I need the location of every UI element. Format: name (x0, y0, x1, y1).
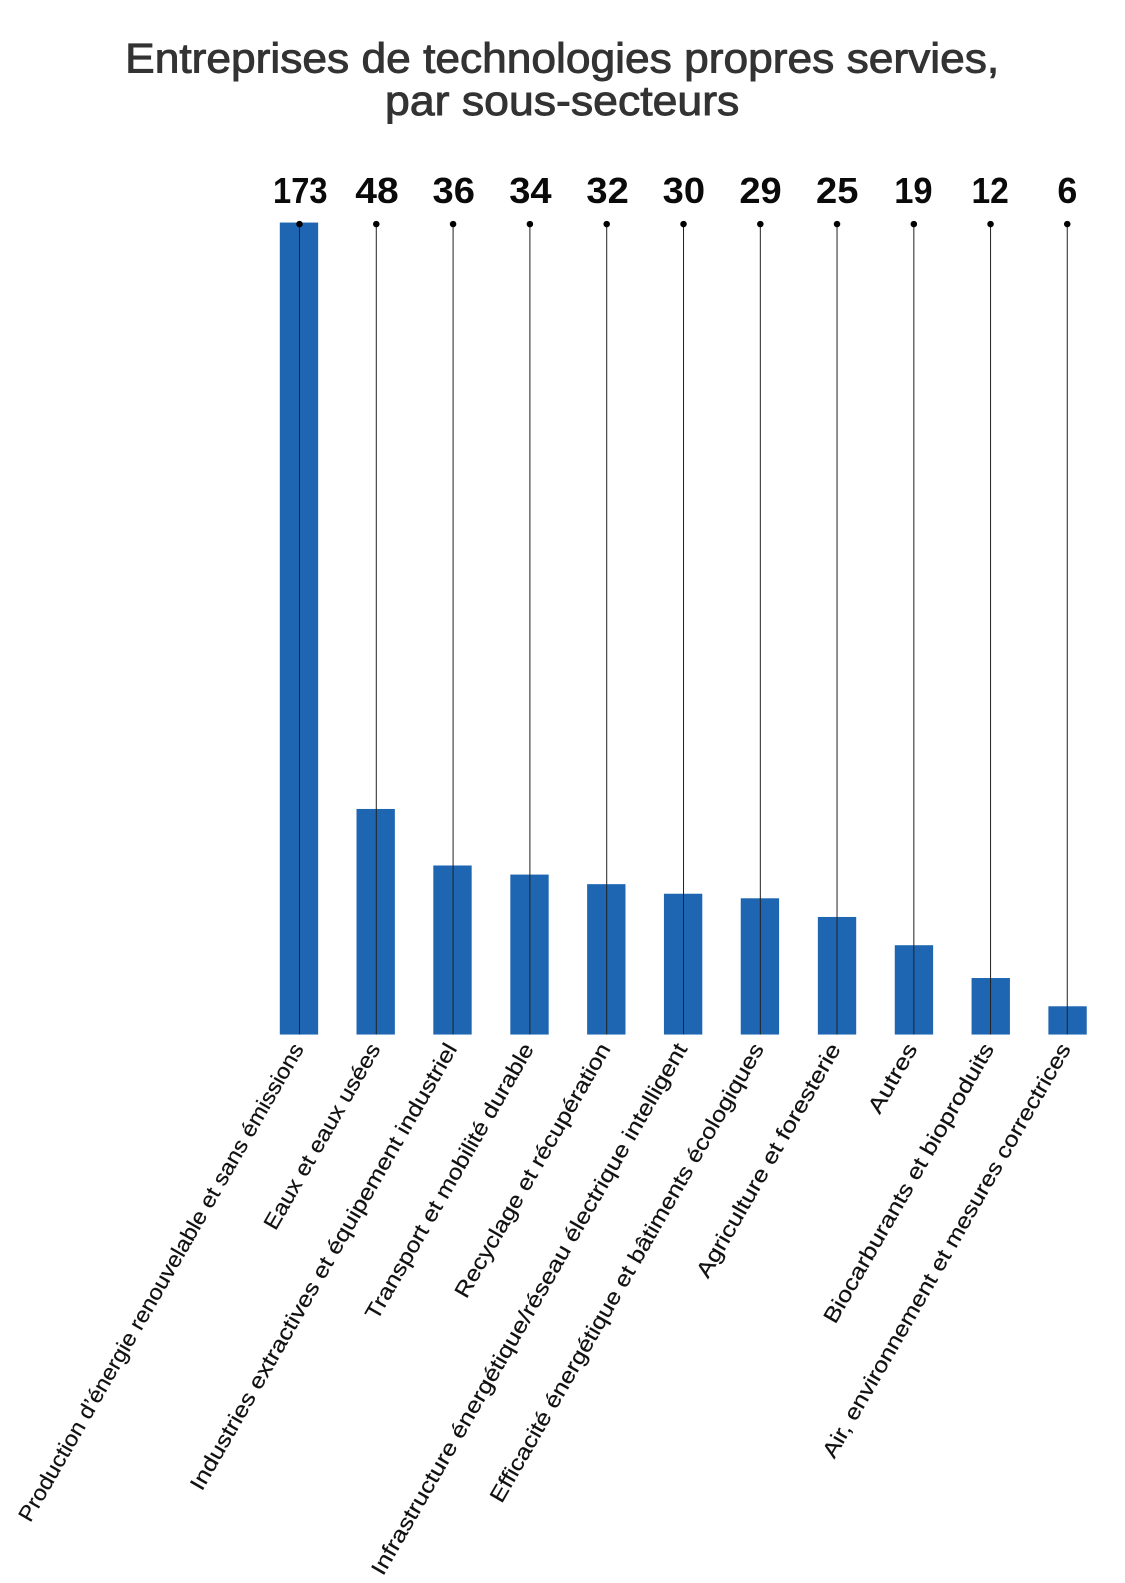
value labels: 32 (586, 171, 629, 211)
value labels: 36 (433, 171, 475, 211)
leader dots (296, 221, 1070, 227)
value labels: 48 (355, 171, 399, 211)
leader lines (299, 224, 1067, 1035)
value labels: 12 (971, 171, 1009, 211)
category labels: Air, environnement et mesures correctrices (817, 1039, 1076, 1462)
category labels: Biocarburants et bioproduits (818, 1039, 999, 1327)
title (125, 36, 999, 124)
category labels: Transport et mobilité durable (360, 1039, 539, 1324)
category labels: Autres (862, 1039, 922, 1118)
value labels: 25 (816, 171, 858, 211)
category labels: Agriculture et foresterie (691, 1039, 846, 1282)
category labels: Production d’énergie renouvelable et sans émissions (13, 1039, 309, 1526)
category labels: Eaux et eaux usées (258, 1039, 385, 1234)
value labels: 6 (1057, 171, 1077, 211)
value labels: 29 (739, 171, 782, 211)
value labels: 19 (894, 171, 933, 211)
value labels: 34 (509, 171, 552, 211)
category labels: Infrastructure énergétique/réseau électrique intelligent (366, 1039, 692, 1579)
category labels: Recyclage et récupération (449, 1039, 615, 1302)
title: Entreprises de technologies propres servies, (125, 36, 999, 82)
value labels: 173 (273, 171, 328, 211)
value labels (273, 171, 1077, 211)
category labels: Industries extractives et équipement industriel (185, 1039, 462, 1494)
category labels: Efficacité énergétique et bâtiments écologiques (484, 1039, 769, 1507)
bars (280, 223, 1087, 1035)
title: par sous-secteurs (385, 78, 739, 124)
value labels: 30 (663, 171, 705, 211)
category labels (13, 1039, 1076, 1579)
